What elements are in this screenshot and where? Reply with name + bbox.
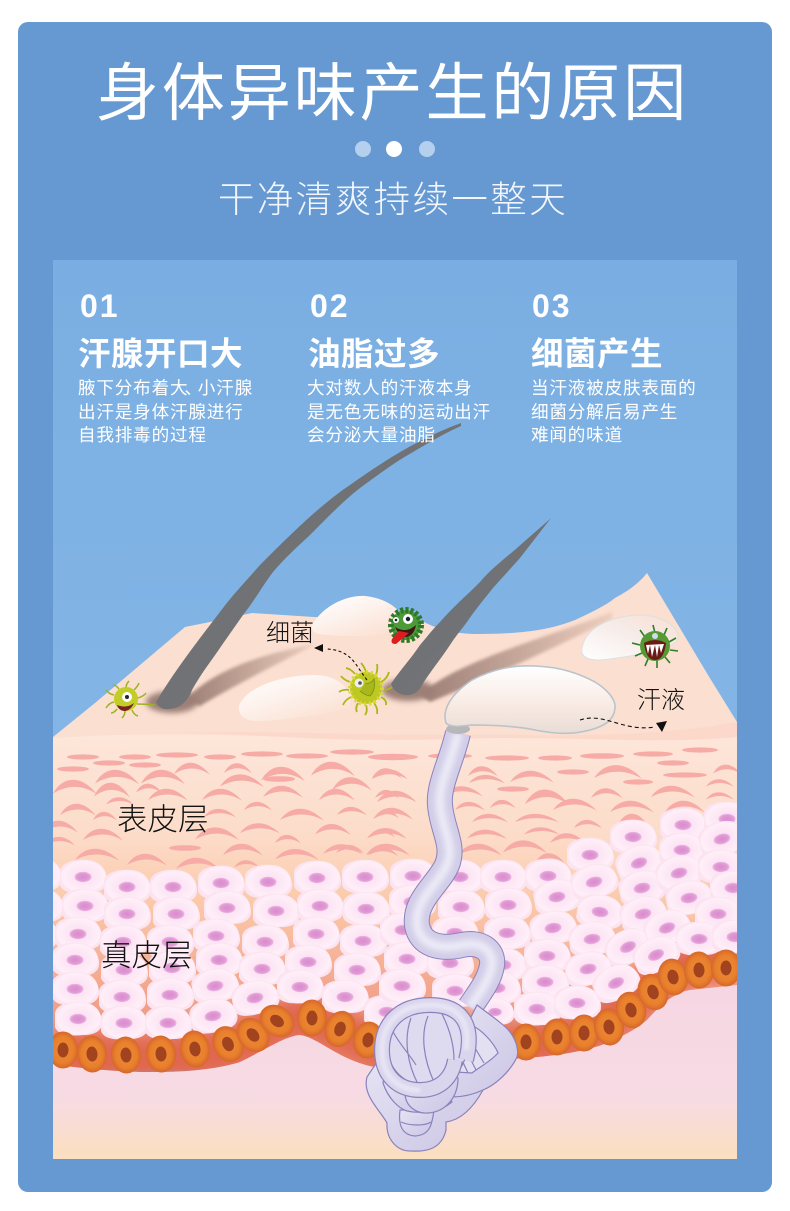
right loop: [454, 1004, 518, 1098]
pagination dots: [355, 141, 435, 157]
basal red band: [53, 958, 737, 1058]
column 2: excess oil: 是无色无味的运动出汗: [307, 402, 491, 422]
icon: dark green bacterium: [632, 625, 678, 668]
column 2: excess oil: 02: [310, 288, 350, 324]
sky background: [53, 260, 737, 737]
skin surface: [53, 573, 737, 738]
label: epidermis: 表皮层: [117, 803, 208, 837]
column 2: excess oil: 会分泌大量油脂: [307, 425, 436, 445]
hair 1: [156, 423, 461, 709]
subtitle: 干净清爽持续一整天: [218, 179, 568, 220]
main ring: [382, 1005, 469, 1090]
lower small lobes: [400, 1110, 434, 1136]
column 3: bacteria: 难闻的味道: [531, 425, 623, 445]
sweat drop: [445, 666, 615, 734]
column 3: bacteria: 细菌分解后易产生: [531, 402, 678, 422]
sweat bubble: right: [582, 615, 678, 660]
column 1: open sweat glands: 出汗是身体汗腺进行: [78, 402, 244, 422]
arrow: to bacteria label: [314, 644, 367, 680]
back lump: [366, 1060, 483, 1151]
lower ring: [404, 1077, 459, 1114]
lower strand: [382, 1080, 453, 1113]
arrow: to sweat label: [580, 718, 667, 732]
sweat bubble: top: [312, 596, 406, 636]
column 2: excess oil: 油脂过多: [308, 336, 440, 372]
pink skin cells: [11, 802, 759, 1039]
column 1: open sweat glands: 自我排毒的过程: [78, 425, 207, 445]
epidermis layer: [53, 734, 737, 1070]
icon: large yellow bacterium: [339, 663, 392, 715]
icon: small yellow bacterium: [106, 681, 155, 718]
column 3: bacteria: 细菌产生: [531, 336, 663, 372]
hair shadows: [146, 612, 612, 713]
column 3: bacteria: 当汗液被皮肤表面的: [531, 378, 697, 398]
sweat bubble: middle: [239, 675, 350, 721]
column 1: open sweat glands: [78, 288, 253, 445]
label: dermis: 真皮层: [101, 939, 192, 973]
label: bacteria: 细菌: [266, 620, 314, 647]
column 1: open sweat glands: 01: [80, 288, 120, 324]
column 1: open sweat glands: 腋下分布着大、小汗腺: [78, 378, 253, 398]
icon: green bacterium with tongue: [391, 610, 421, 644]
panel: skin illustration: [11, 260, 759, 1159]
title: 身体异味产生的原因: [96, 59, 689, 129]
column 3: bacteria: 03: [532, 288, 572, 324]
skin scale pattern: [42, 747, 741, 870]
label: sweat: 汗液: [637, 687, 685, 714]
column 2: excess oil: 大对数人的汗液本身: [307, 378, 473, 398]
ring inner lobes: [390, 1013, 465, 1082]
column 1: open sweat glands: 汗腺开口大: [78, 336, 243, 372]
hair 2: [391, 518, 551, 695]
sweat tube: [417, 733, 492, 1007]
column 2: excess oil: [307, 288, 491, 445]
column 3: bacteria: [531, 288, 697, 445]
sweat gland coil: [366, 1005, 518, 1151]
dermis: [53, 985, 737, 1159]
orange basal cells: [48, 950, 741, 1075]
